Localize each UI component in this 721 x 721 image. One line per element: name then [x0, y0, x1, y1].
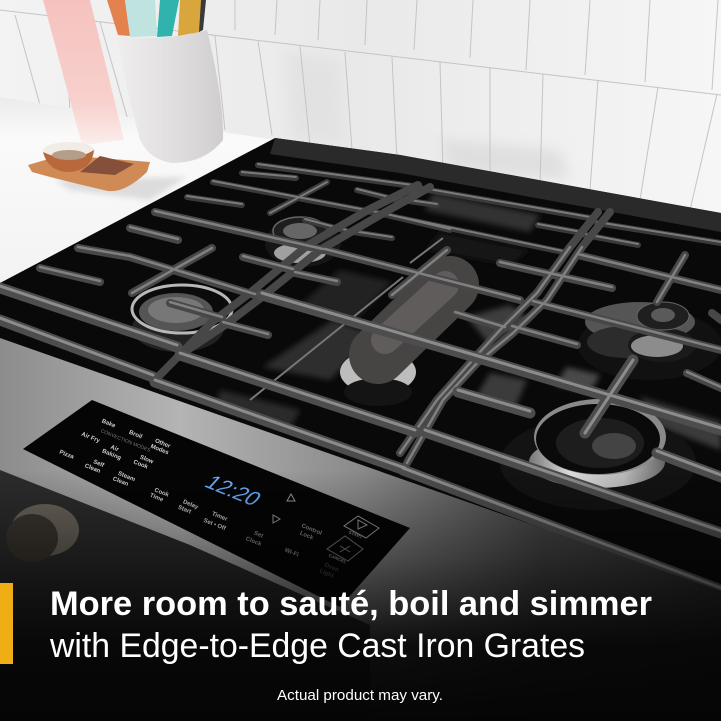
accent bar [0, 583, 13, 664]
front section [0, 286, 721, 590]
preset labels: Baking [101, 449, 122, 462]
cast iron grates [0, 164, 721, 590]
preset labels: Pizza [58, 449, 75, 461]
wooden tray with bowl [28, 142, 187, 200]
lower keys: Oven [323, 562, 340, 574]
control panel [23, 400, 410, 607]
lower keys: Light [318, 569, 334, 580]
utensils [107, 0, 206, 37]
cooktop surface [0, 138, 721, 591]
preset labels: Other [154, 438, 172, 450]
preset labels [58, 419, 229, 533]
preset labels: Broil [128, 430, 143, 441]
preset labels: Time [149, 493, 165, 504]
glossy reflections [215, 193, 721, 450]
back trim band [270, 138, 721, 232]
lower keys: START [348, 530, 364, 540]
preset labels: Cook [132, 459, 149, 471]
lower keys: Clock [245, 536, 263, 548]
preset labels: Modes [149, 444, 170, 457]
back section [187, 164, 721, 252]
preset labels: Bake [101, 419, 117, 430]
dark gradient overlay [0, 470, 721, 721]
preset labels: Clean [112, 476, 129, 488]
kitchen wall [0, 0, 721, 240]
preset labels: Steam [117, 471, 136, 483]
convection modes label: CONVECTION MODES [100, 428, 152, 454]
panel icons [273, 494, 379, 561]
utensil crock [117, 30, 223, 163]
back right burner [578, 302, 721, 380]
stainless front panel [0, 338, 721, 721]
lower keys: Control [300, 523, 323, 537]
disclaimer: Actual product may vary. [277, 688, 443, 704]
front right burner [500, 399, 696, 510]
back left burner [265, 217, 341, 267]
preset labels: Delay [182, 499, 200, 511]
preset labels: Start [177, 505, 192, 515]
lower keys: Lock [299, 531, 315, 542]
preset labels: Slow [139, 455, 154, 466]
lower keys: Wi-Fi [283, 548, 300, 559]
center oval burner [340, 285, 450, 406]
preset labels: Set • Off [202, 518, 227, 533]
lower keys: CANCEL [328, 553, 347, 565]
water bottle [43, 0, 124, 145]
preset labels: Self [92, 459, 106, 469]
preset labels: Clean [84, 463, 101, 475]
subheading: with Edge-to-Edge Cast Iron Grates [49, 627, 585, 665]
headline: More room to sauté, boil and simmer [50, 585, 652, 623]
preset labels: Cook [153, 487, 170, 499]
preset labels: Air Fry [80, 432, 101, 445]
diagonal trim line [250, 238, 443, 400]
middle section [40, 185, 721, 463]
lower keys [245, 523, 364, 580]
oven door and knob [0, 470, 370, 721]
lower keys: Set [253, 531, 264, 540]
countertop [0, 97, 275, 300]
front left burner [132, 285, 232, 352]
preset labels: Timer [211, 511, 229, 523]
preset labels: Air [109, 445, 120, 454]
clock display: 12:20 [200, 471, 267, 510]
